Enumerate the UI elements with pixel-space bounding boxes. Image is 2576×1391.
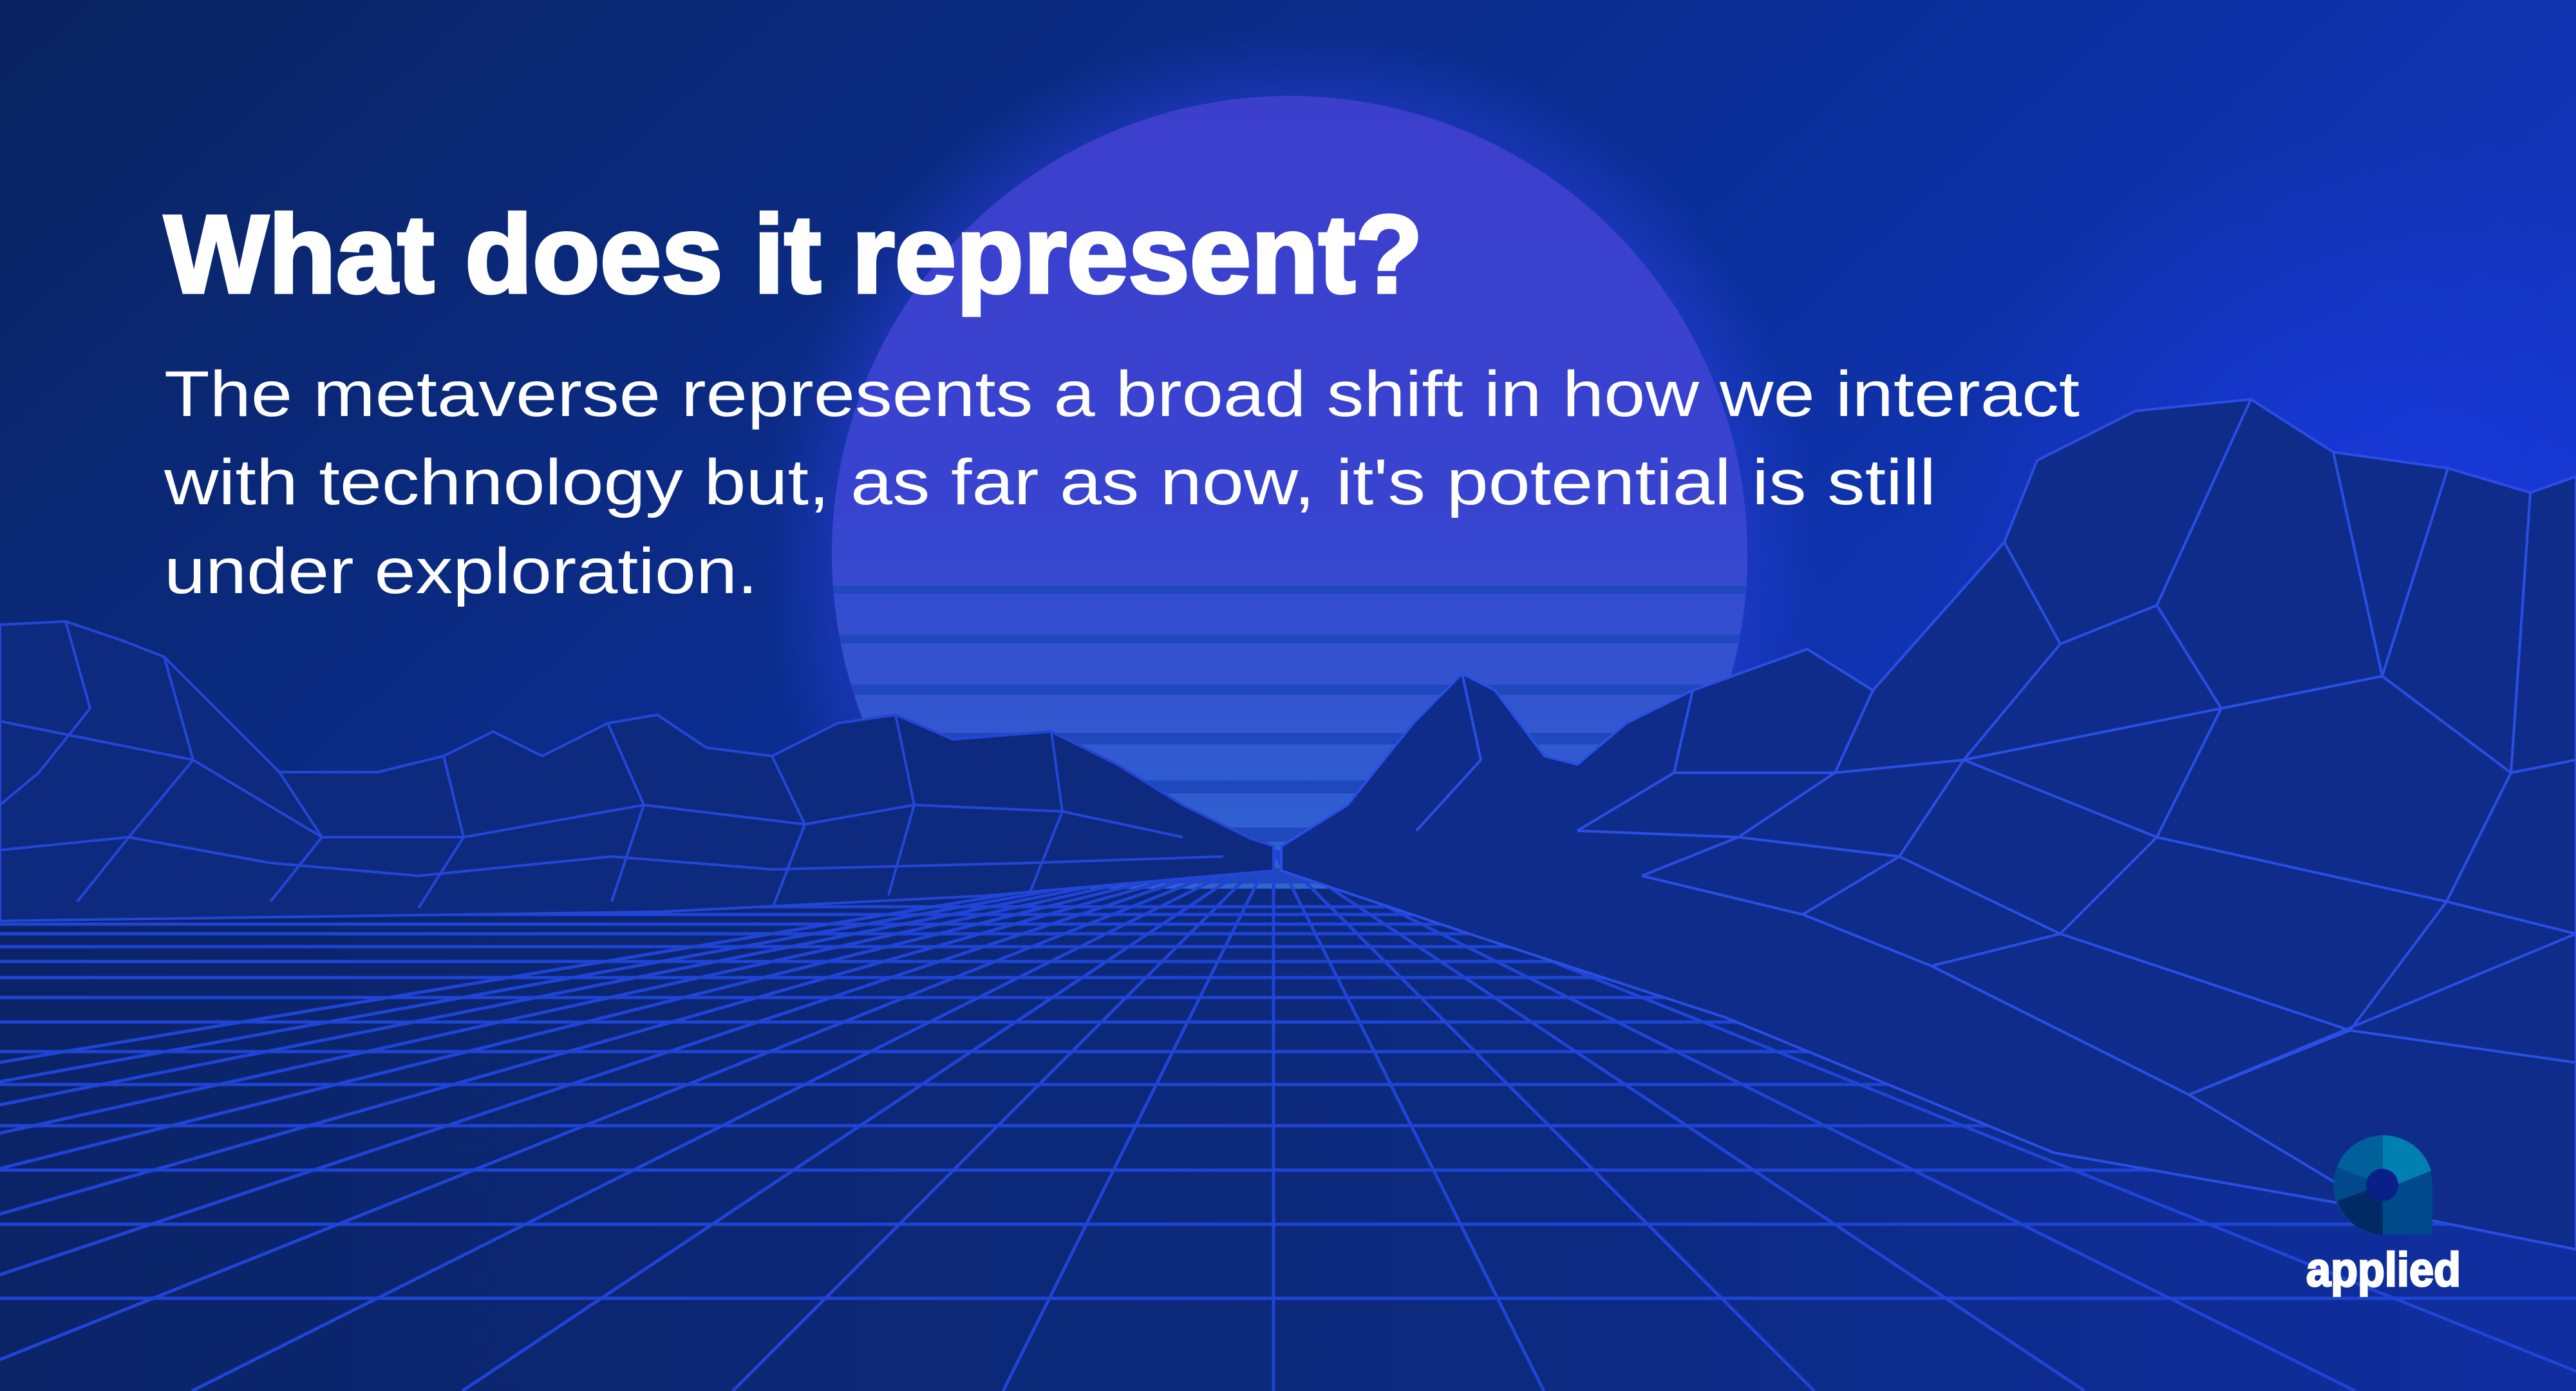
- title: What does it represent?: [164, 193, 1423, 316]
- logo: applied: [2306, 1135, 2461, 1296]
- floor grid: [0, 850, 2576, 1391]
- body text: with technology but, as far as now, it's potential is still: [164, 446, 1936, 518]
- mountains: right range: [1281, 399, 2576, 1249]
- body text: under exploration.: [164, 535, 758, 607]
- body text: The metaverse represents a broad shift in how we interact: [164, 358, 2080, 430]
- sun: [832, 96, 1747, 889]
- mountains: left range: [0, 621, 1274, 921]
- logo: applied: applied: [2306, 1243, 2461, 1296]
- body text: [164, 358, 2080, 607]
